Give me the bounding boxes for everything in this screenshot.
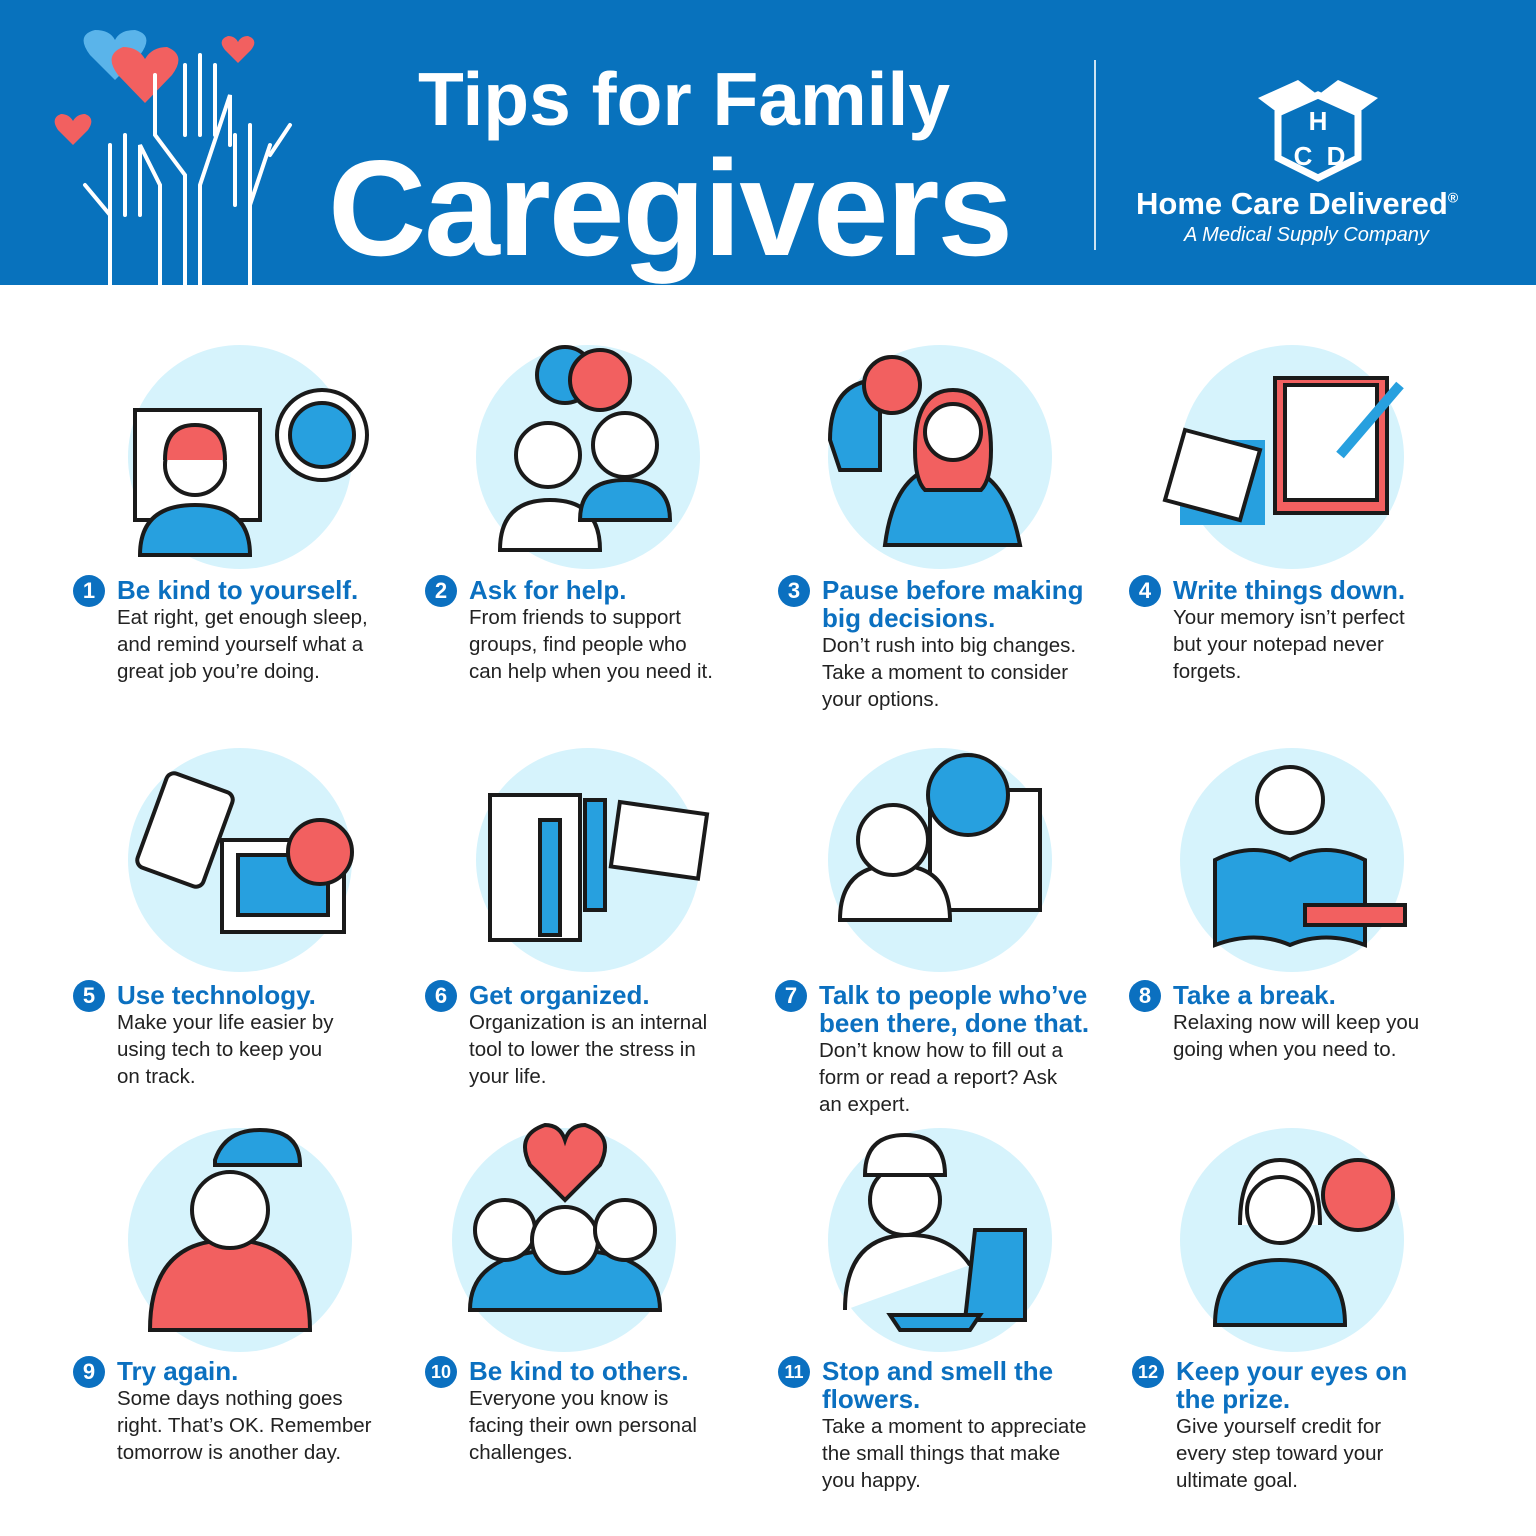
header band bbox=[0, 0, 1536, 285]
header band: Home Care Delivered® bbox=[1136, 186, 1458, 221]
tip 11: Take a moment to appreciate bbox=[822, 1415, 1086, 1438]
tip 8: Relaxing now will keep you bbox=[1173, 1011, 1419, 1034]
logo bbox=[1258, 80, 1378, 182]
tip 8: Take a break. bbox=[1173, 980, 1336, 1010]
tip 7: been there, done that. bbox=[819, 1008, 1089, 1038]
tip 5: Make your life easier by bbox=[117, 1011, 333, 1034]
tip 5: Use technology. bbox=[117, 980, 316, 1010]
logo: C bbox=[1294, 141, 1313, 171]
text: 5 bbox=[83, 983, 95, 1008]
tip 6: tool to lower the stress in bbox=[469, 1038, 696, 1061]
tip 10: Everyone you know is bbox=[469, 1387, 668, 1410]
tip 3: Pause before making bbox=[822, 575, 1084, 605]
tip 5: using tech to keep you bbox=[117, 1038, 322, 1061]
tip 12: ultimate goal. bbox=[1176, 1469, 1298, 1492]
tip 2: From friends to support bbox=[469, 606, 681, 629]
text: 6 bbox=[435, 983, 447, 1008]
text: 3 bbox=[788, 578, 800, 603]
header band: Caregivers bbox=[328, 132, 1011, 284]
tip 1 bbox=[73, 575, 368, 683]
icon: illustrations (simplified) bbox=[133, 345, 1407, 1332]
tip 1: and remind yourself what a bbox=[117, 633, 363, 656]
tip 5 bbox=[73, 980, 334, 1088]
tip 7: Talk to people who’ve bbox=[819, 980, 1087, 1010]
tip 9: Try again. bbox=[117, 1356, 238, 1386]
tip 3: Take a moment to consider bbox=[822, 661, 1068, 684]
tip 12 bbox=[1132, 1356, 1407, 1492]
tip 4: Your memory isn’t perfect bbox=[1173, 606, 1405, 629]
tip 12: the prize. bbox=[1176, 1384, 1290, 1414]
tip 1: Eat right, get enough sleep, bbox=[117, 606, 368, 629]
header band: A Medical Supply Company bbox=[1184, 224, 1429, 246]
tip 5: on track. bbox=[117, 1065, 196, 1088]
tip 1: great job you’re doing. bbox=[117, 660, 320, 683]
tip 10: challenges. bbox=[469, 1441, 573, 1464]
tip 6: Organization is an internal bbox=[469, 1011, 707, 1034]
text: 12 bbox=[1138, 1362, 1158, 1382]
text: 1 bbox=[83, 578, 95, 603]
tip 11 bbox=[778, 1356, 1086, 1492]
title: Tips for Family bbox=[418, 57, 950, 141]
tip 11: you happy. bbox=[822, 1469, 921, 1492]
tip 2: groups, find people who bbox=[469, 633, 687, 656]
text: 10 bbox=[431, 1362, 451, 1382]
logo: D bbox=[1327, 141, 1345, 171]
tip 4: Write things down. bbox=[1173, 575, 1405, 605]
tip 7: Don’t know how to fill out a bbox=[819, 1039, 1063, 1062]
text: 9 bbox=[83, 1359, 95, 1384]
tip 11: flowers. bbox=[822, 1384, 920, 1414]
text: 7 bbox=[785, 983, 797, 1008]
tip 6: your life. bbox=[469, 1065, 546, 1088]
tip 1: Be kind to yourself. bbox=[117, 575, 358, 605]
tip 10: Be kind to others. bbox=[469, 1356, 689, 1386]
tip 4: but your notepad never bbox=[1173, 633, 1384, 656]
text: 11 bbox=[784, 1362, 804, 1382]
tip 3: big decisions. bbox=[822, 603, 995, 633]
tip 2 bbox=[425, 575, 713, 683]
tip 12: Give yourself credit for bbox=[1176, 1415, 1381, 1438]
tip 7: an expert. bbox=[819, 1093, 910, 1116]
circles bbox=[128, 345, 352, 569]
tip 12: every step toward your bbox=[1176, 1442, 1383, 1465]
tip 4 bbox=[1129, 575, 1405, 683]
text: 8 bbox=[1139, 983, 1151, 1008]
tip 3: Don’t rush into big changes. bbox=[822, 634, 1076, 657]
text: 2 bbox=[435, 578, 447, 603]
tip 6 bbox=[425, 980, 707, 1088]
tip 11: Stop and smell the bbox=[822, 1356, 1053, 1386]
tip 3 bbox=[778, 575, 1084, 711]
tip 6: Get organized. bbox=[469, 980, 650, 1010]
tip 10 bbox=[425, 1356, 697, 1464]
tip 7: form or read a report? Ask bbox=[819, 1066, 1057, 1089]
tip 3: your options. bbox=[822, 688, 939, 711]
tip 2: can help when you need it. bbox=[469, 660, 713, 683]
tip 10: facing their own personal bbox=[469, 1414, 697, 1437]
tip 9 bbox=[73, 1356, 372, 1464]
tip 11: the small things that make bbox=[822, 1442, 1060, 1465]
tip 8: going when you need to. bbox=[1173, 1038, 1396, 1061]
tip 9: tomorrow is another day. bbox=[117, 1441, 341, 1464]
tip 9: right. That’s OK. Remember bbox=[117, 1414, 371, 1437]
tip 9: Some days nothing goes bbox=[117, 1387, 343, 1410]
logo: H bbox=[1309, 106, 1327, 136]
tip 7 bbox=[775, 980, 1089, 1116]
tip 4: forgets. bbox=[1173, 660, 1241, 683]
tip 8 bbox=[1129, 980, 1419, 1061]
tip 2: Ask for help. bbox=[469, 575, 626, 605]
icon: hands and hearts bbox=[54, 30, 292, 285]
text: 4 bbox=[1139, 578, 1151, 603]
tip 12: Keep your eyes on bbox=[1176, 1356, 1407, 1386]
